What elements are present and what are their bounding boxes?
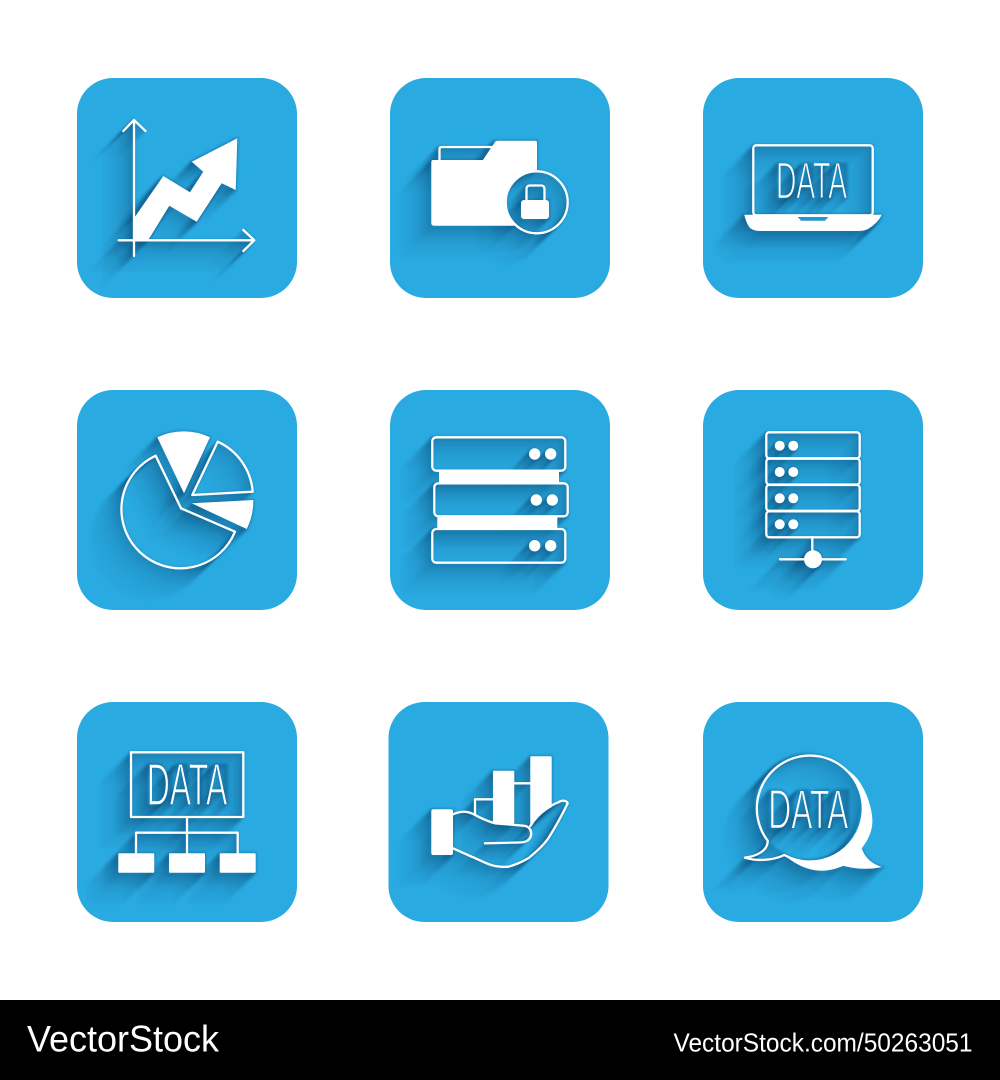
footer bar bbox=[0, 1000, 1000, 1080]
text: brand logo: VectorStock bbox=[27, 1019, 219, 1060]
icon: folder bbox=[431, 141, 537, 226]
text: DATA in bubble: DATA bbox=[768, 778, 849, 840]
icon: rear speech bubble bbox=[784, 769, 882, 871]
icon: bar chart columns bbox=[475, 756, 552, 825]
icon: laptop bbox=[744, 145, 882, 231]
text: DATA on board: DATA bbox=[147, 751, 228, 818]
icon: hierarchy boxes bbox=[118, 853, 256, 873]
text: DATA on laptop screen: DATA bbox=[776, 152, 847, 210]
icon: server connector bands bbox=[437, 471, 559, 529]
icon: top server unit bbox=[432, 437, 565, 471]
icon: network node bbox=[780, 537, 846, 568]
panel: server stack tile bbox=[390, 390, 610, 610]
icon: chart axes bbox=[119, 120, 254, 256]
icon: main pie slice bbox=[121, 456, 235, 568]
icon: bottom server unit bbox=[432, 529, 565, 563]
panel: hand with bar chart tile bbox=[388, 702, 608, 922]
icon: data board frame bbox=[131, 752, 243, 817]
panel: network server tile bbox=[703, 390, 923, 610]
icon: middle server unit bbox=[434, 483, 568, 516]
icon: right pie slice bbox=[192, 442, 253, 495]
icon: open hand bbox=[431, 801, 568, 867]
icon: padlock in circle bbox=[506, 171, 568, 233]
panel: laptop data tile bbox=[703, 78, 923, 298]
panel: data hierarchy tile bbox=[77, 702, 297, 922]
panel: pie chart tile bbox=[77, 390, 297, 610]
icon: server rack bbox=[766, 432, 860, 537]
panel: growth chart tile bbox=[77, 78, 297, 298]
icon: rising arrow bbox=[134, 138, 237, 241]
panel: locked folder tile bbox=[390, 78, 610, 298]
icon: hierarchy connectors bbox=[136, 817, 238, 854]
icon: top pie slice bbox=[157, 431, 210, 493]
panel: speech bubble data tile bbox=[703, 702, 923, 922]
text: image url: VectorStock.com/50263051 bbox=[674, 1030, 972, 1058]
icon: lower pie slice bbox=[192, 500, 253, 529]
icon: front speech bubble bbox=[745, 756, 863, 862]
